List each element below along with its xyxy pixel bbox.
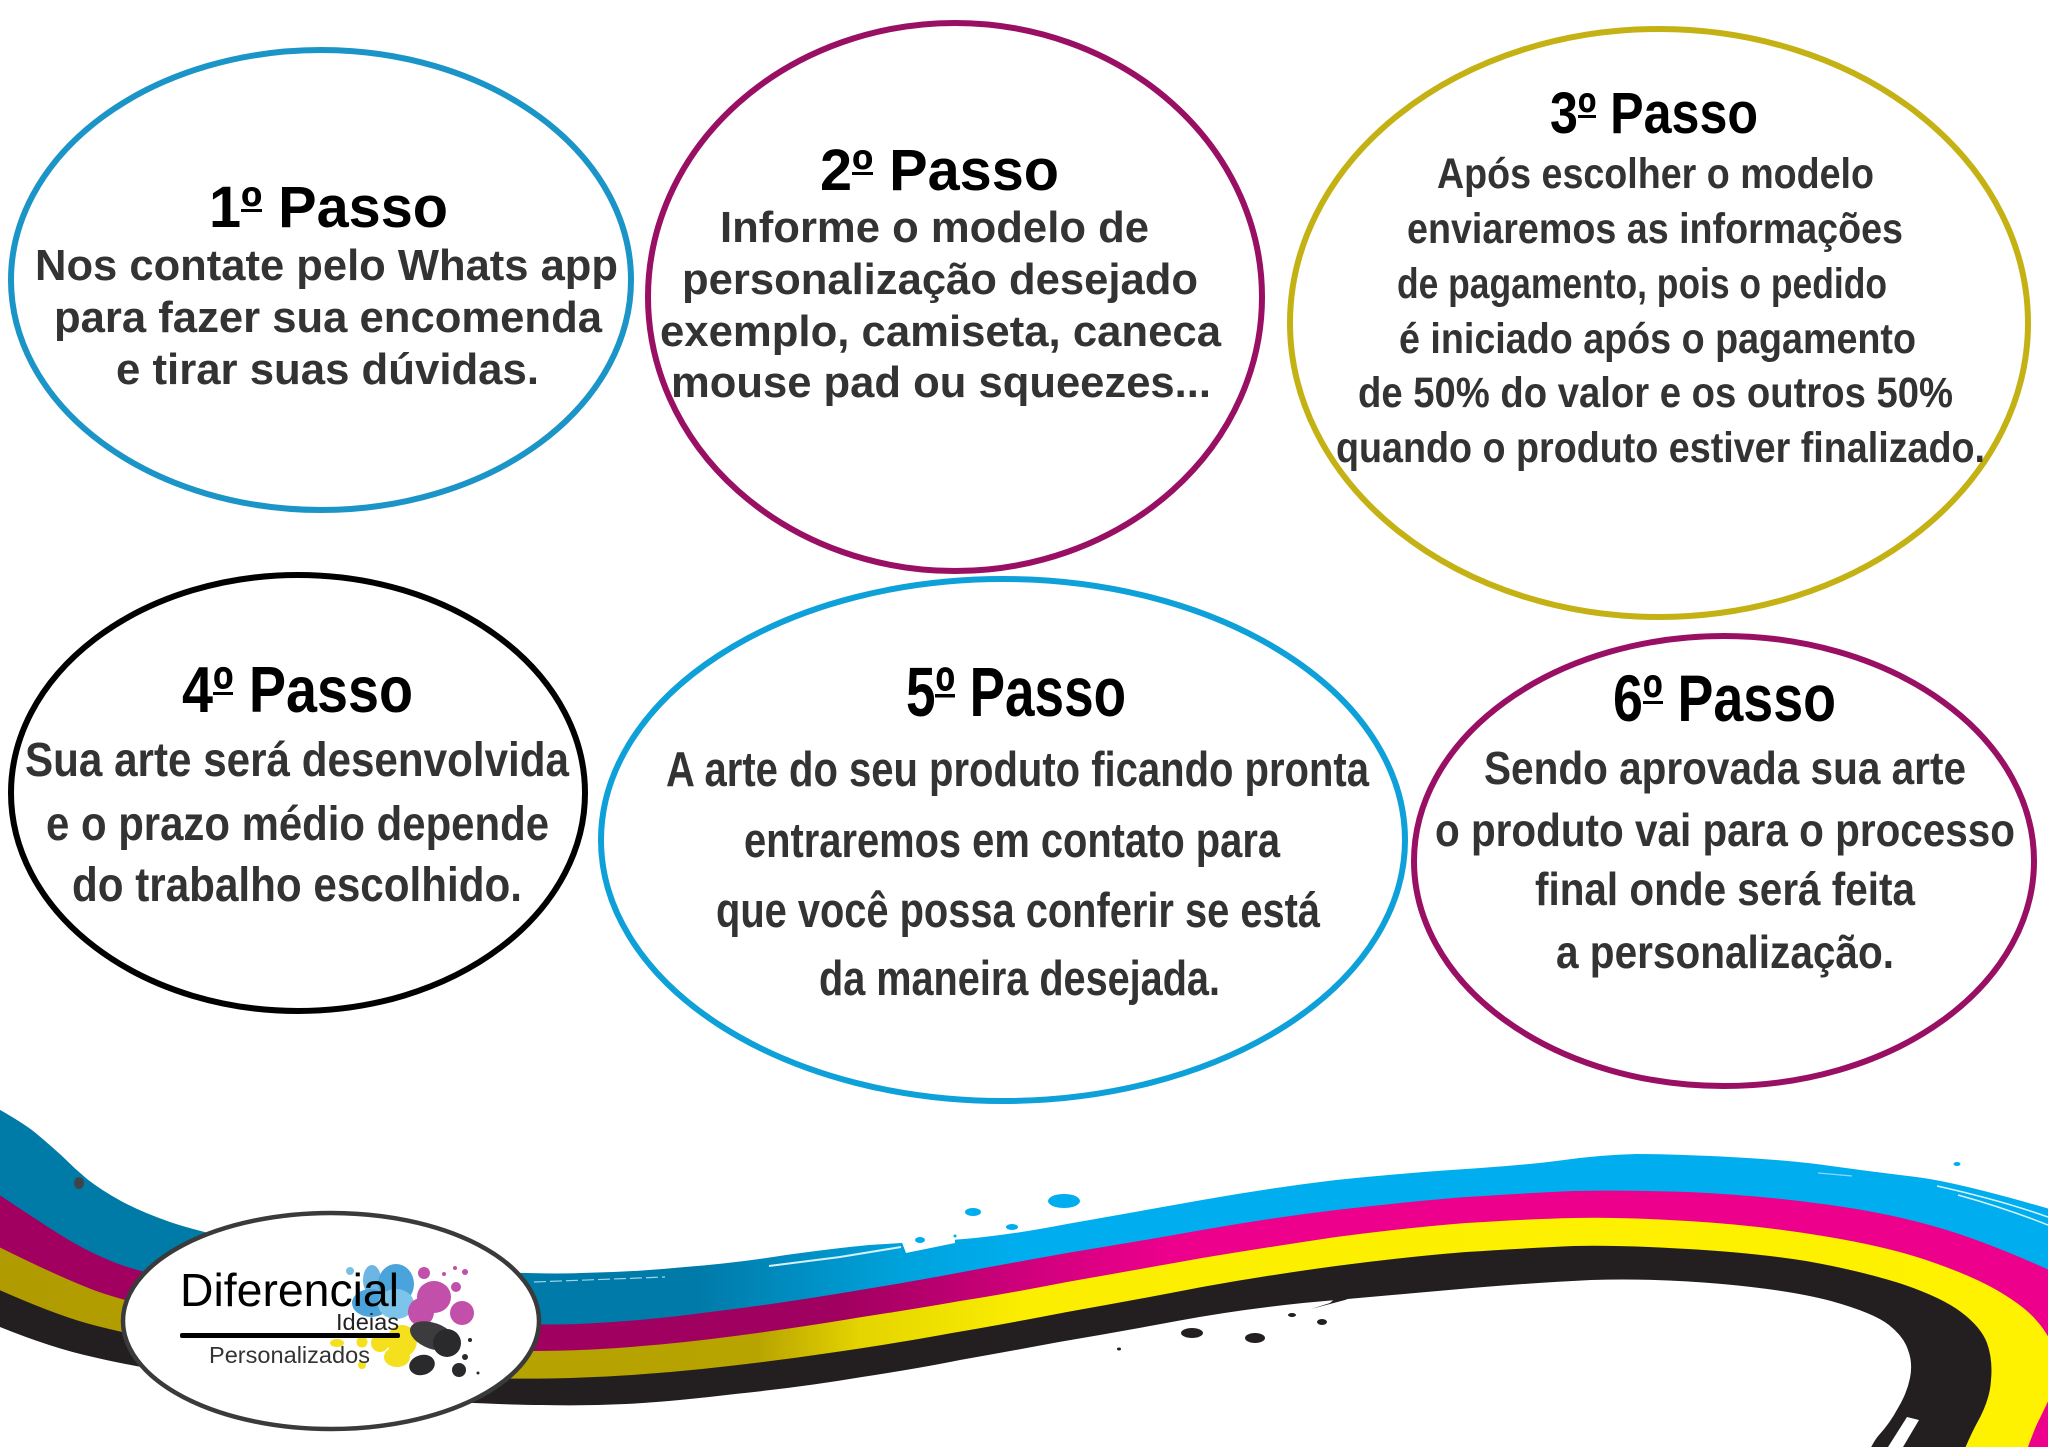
step 4 ordinal underline <box>213 692 233 695</box>
step 1 heading: 1º Passo <box>209 175 448 240</box>
step 6 heading: 6º Passo <box>1613 661 1836 735</box>
step 6 text: Sendo aprovada sua arte <box>1484 742 1966 794</box>
logo badge <box>123 1213 539 1429</box>
ribbon brush details <box>534 1173 2048 1447</box>
ribbon band: magenta <box>0 1191 2048 1447</box>
ribbon band: black <box>0 1246 1992 1447</box>
panel: step 1 <box>11 50 631 510</box>
step 3 text <box>1336 150 1985 472</box>
step 2 outline <box>648 23 1262 571</box>
step 5 heading: 5º Passo <box>906 653 1126 731</box>
ribbon band: yellow <box>0 1218 2048 1447</box>
step 2 text: personalização desejado <box>682 255 1198 304</box>
step 4 text: e o prazo médio depende <box>46 798 549 851</box>
step 2 text: Informe o modelo de <box>720 203 1149 252</box>
step 2 text <box>660 203 1222 407</box>
ribbon band: cyan <box>0 1107 2048 1447</box>
logo splash: yellow <box>330 1325 417 1369</box>
panel: step 3 <box>1290 29 2028 617</box>
logo splash: black <box>406 1316 480 1378</box>
step 3 ordinal underline <box>1578 115 1596 118</box>
step 5 text: A arte do seu produto ficando pronta <box>666 743 1370 797</box>
step 5 text: entraremos em contato para <box>744 814 1281 868</box>
step 3 outline <box>1290 29 2028 617</box>
step 2 text: mouse pad ou squeezes... <box>671 358 1211 407</box>
step 5 text: da maneira desejada. <box>819 952 1220 1006</box>
logo rule <box>180 1333 400 1338</box>
step 6 outline <box>1414 636 2034 1086</box>
step 1 ordinal underline <box>241 209 262 212</box>
ribbon inner white cut-out <box>0 1280 1911 1447</box>
panel: step 4 <box>11 575 585 1011</box>
step 4 text <box>25 734 569 912</box>
step 2 text: exemplo, camiseta, caneca <box>660 307 1222 356</box>
panel: step 6 <box>1414 636 2034 1086</box>
logo splash: magenta <box>408 1266 474 1326</box>
logo splash: blue <box>346 1264 414 1319</box>
step 2 heading: 2º Passo <box>820 138 1059 203</box>
step 3 text: enviaremos as informações <box>1407 205 1903 253</box>
CMYK ribbon <box>0 1107 2048 1447</box>
step 3 text: de pagamento, pois o pedido <box>1397 260 1887 308</box>
paint splatter: cyan drops <box>915 1162 1960 1243</box>
logo small word: Ideias <box>336 1309 399 1335</box>
logo oval <box>123 1213 539 1429</box>
step 6 text: a personalização. <box>1556 926 1894 978</box>
step 3 heading: 3º Passo <box>1550 81 1758 146</box>
step 3 text: é iniciado após o pagamento <box>1399 315 1916 363</box>
panel: step 2 <box>648 23 1262 571</box>
logo name: Diferencial <box>180 1264 399 1316</box>
step 2 ordinal underline <box>852 172 873 175</box>
step 5 text <box>666 743 1370 1006</box>
step 1 text <box>35 241 618 394</box>
step 5 outline <box>601 579 1405 1101</box>
paint splatter: black drops <box>74 1177 1327 1350</box>
step 4 outline <box>11 575 585 1011</box>
step 1 text: Nos contate pelo Whats app <box>35 241 618 290</box>
step 3 text: Após escolher o modelo <box>1437 150 1874 198</box>
step 5 text: que você possa conferir se está <box>716 884 1321 938</box>
step 5 ordinal underline <box>935 694 955 698</box>
step 4 text: do trabalho escolhido. <box>72 859 522 912</box>
step 4 heading: 4º Passo <box>182 653 413 726</box>
step 3 text: de 50% do valor e os outros 50% <box>1358 369 1953 417</box>
step 6 ordinal underline <box>1643 701 1663 704</box>
step 6 text <box>1435 742 2015 978</box>
panel: step 5 <box>601 579 1405 1101</box>
step 6 text: final onde será feita <box>1535 863 1915 915</box>
step 1 text: e tirar suas dúvidas. <box>116 345 539 394</box>
step 1 outline <box>11 50 631 510</box>
step 4 text: Sua arte será desenvolvida <box>25 734 569 787</box>
step 1 text: para fazer sua encomenda <box>54 293 603 342</box>
logo subtitle: Personalizados <box>209 1342 370 1368</box>
